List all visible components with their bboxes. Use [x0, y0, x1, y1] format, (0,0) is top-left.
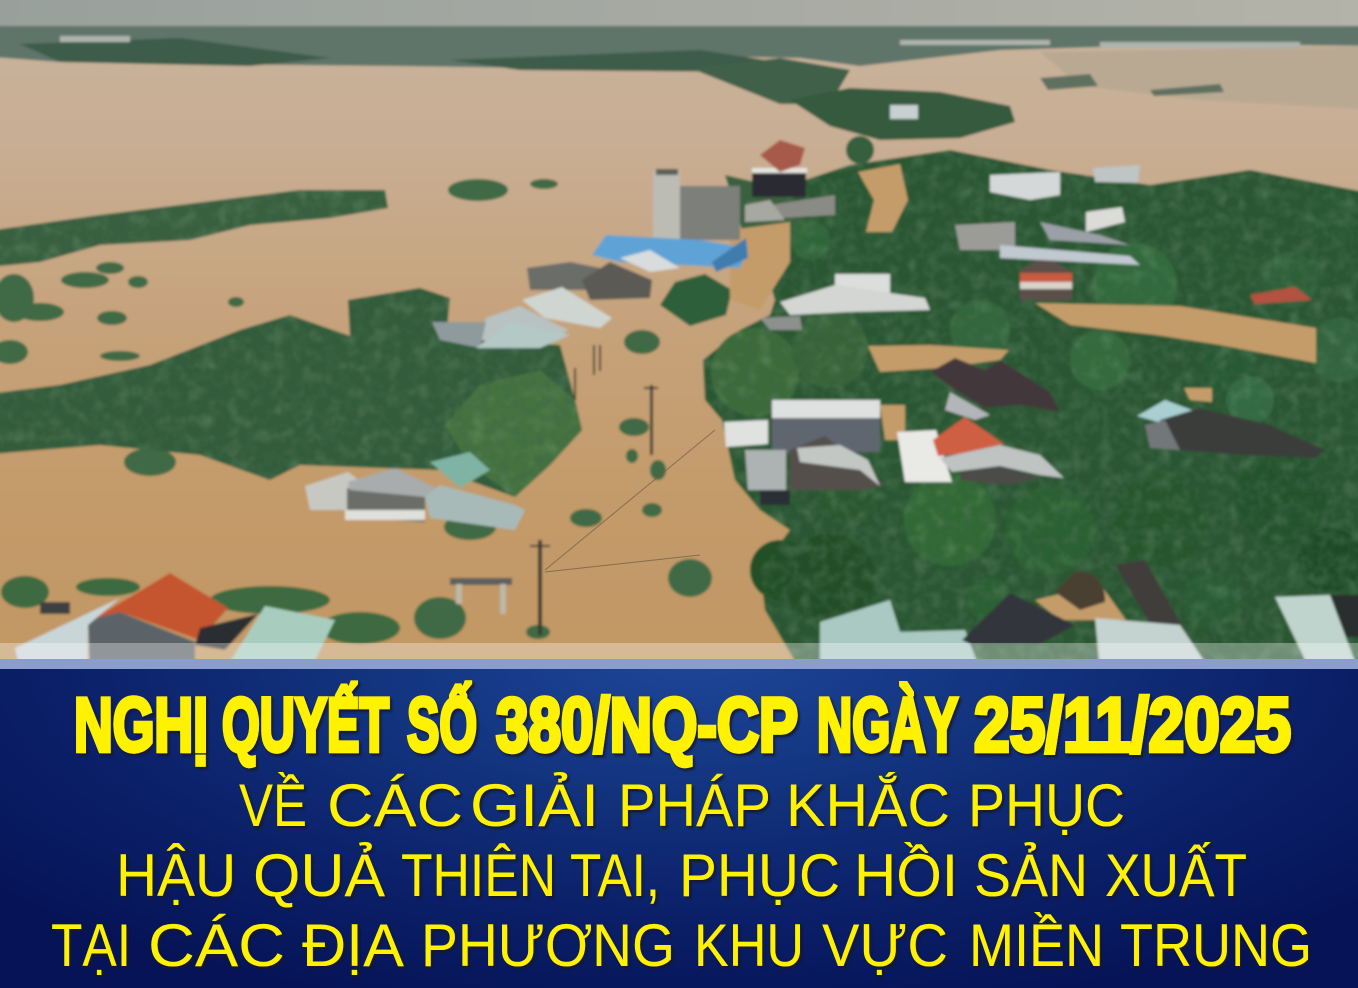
heading: resolution number: NGHỊ [74, 683, 208, 768]
subtitle line 1: PHỤC [968, 772, 1125, 839]
grey house cluster [432, 287, 612, 348]
white house [760, 274, 930, 330]
orange roof house [1020, 256, 1072, 300]
upper-right island [790, 88, 1015, 140]
subtitle line 3 [51, 912, 1312, 979]
heading: resolution number: NGÀY [817, 683, 958, 768]
subtitle line 3: TẠI [51, 912, 131, 979]
subtitle line 2: THIÊN [401, 842, 556, 909]
teal and dark long house [1137, 400, 1325, 458]
subtitle line 1: KHẮC [786, 772, 950, 839]
distant flooded land [0, 26, 1358, 110]
flood water [0, 0, 1358, 680]
right village vegetation [703, 150, 1358, 670]
subtitle line 3: TRUNG [1120, 912, 1312, 979]
subtitle line 3: CÁC [148, 912, 285, 979]
water channels in village [730, 164, 1316, 620]
subtitle line 1: VỀ [239, 772, 307, 839]
foreground house with orange roof [15, 573, 335, 670]
foliage texture [0, 152, 1358, 659]
red-roof house [897, 417, 1064, 485]
gate [450, 578, 512, 614]
aerial photo: flooded village [0, 0, 1358, 680]
upper village roofs [890, 105, 1312, 304]
dark-roof houses [930, 358, 1060, 420]
dark building top [745, 140, 835, 222]
foreground bushes [1, 576, 400, 644]
subtitle line 2 [116, 842, 1247, 909]
sky haze [0, 0, 1358, 28]
subtitle line 1: GIẢI [470, 772, 599, 839]
main palm mass, left [0, 288, 582, 497]
subtitle line 3: KHU [694, 912, 804, 979]
houses behind the blue roof [527, 250, 680, 300]
translucent strip over the photo [0, 643, 1358, 659]
heading: resolution number [74, 683, 1291, 768]
subtitle line 2: TAI, [570, 842, 660, 909]
bright tree by the shed [445, 370, 582, 497]
tree canopy patches [660, 136, 1358, 628]
blue roof hall [592, 235, 748, 272]
heading: resolution number: 25/11/2025 [974, 683, 1291, 768]
subtitle line 1: PHÁP [618, 772, 771, 839]
subtitle line 1 [239, 772, 1125, 839]
heading: resolution number: 380/NQ-CP [496, 683, 798, 768]
subtitle line 3: MIỀN [969, 912, 1104, 979]
submerged shed [305, 452, 525, 530]
utility wires [545, 430, 715, 572]
subtitle line 2: PHỤC [679, 842, 840, 909]
heading: resolution number: QUYẾT [222, 683, 389, 768]
periwinkle divider band [0, 659, 1358, 669]
subtitle line 3: VỰC [822, 912, 948, 979]
subtitle line 1: CÁC [327, 772, 463, 839]
subtitle line 2: HỒI [854, 842, 958, 909]
bottom-right roofs [820, 560, 1358, 670]
left palm strip [0, 190, 388, 268]
heading: resolution number: SỐ [407, 683, 477, 768]
power poles [530, 345, 658, 635]
silo and grey building [653, 169, 740, 240]
subtitle line 2: SẢN [974, 842, 1088, 909]
subtitle line 3: ĐỊA [302, 912, 404, 979]
subtitle line 2: QUẢ [253, 842, 385, 909]
subtitle line 2: HẬU [116, 842, 236, 909]
blue title panel [0, 669, 1358, 988]
subtitle line 3: PHƯƠNG [421, 912, 675, 979]
subtitle line 2: XUẤT [1105, 842, 1247, 909]
grey two-storey house [724, 400, 885, 505]
small islets on water [0, 179, 712, 639]
